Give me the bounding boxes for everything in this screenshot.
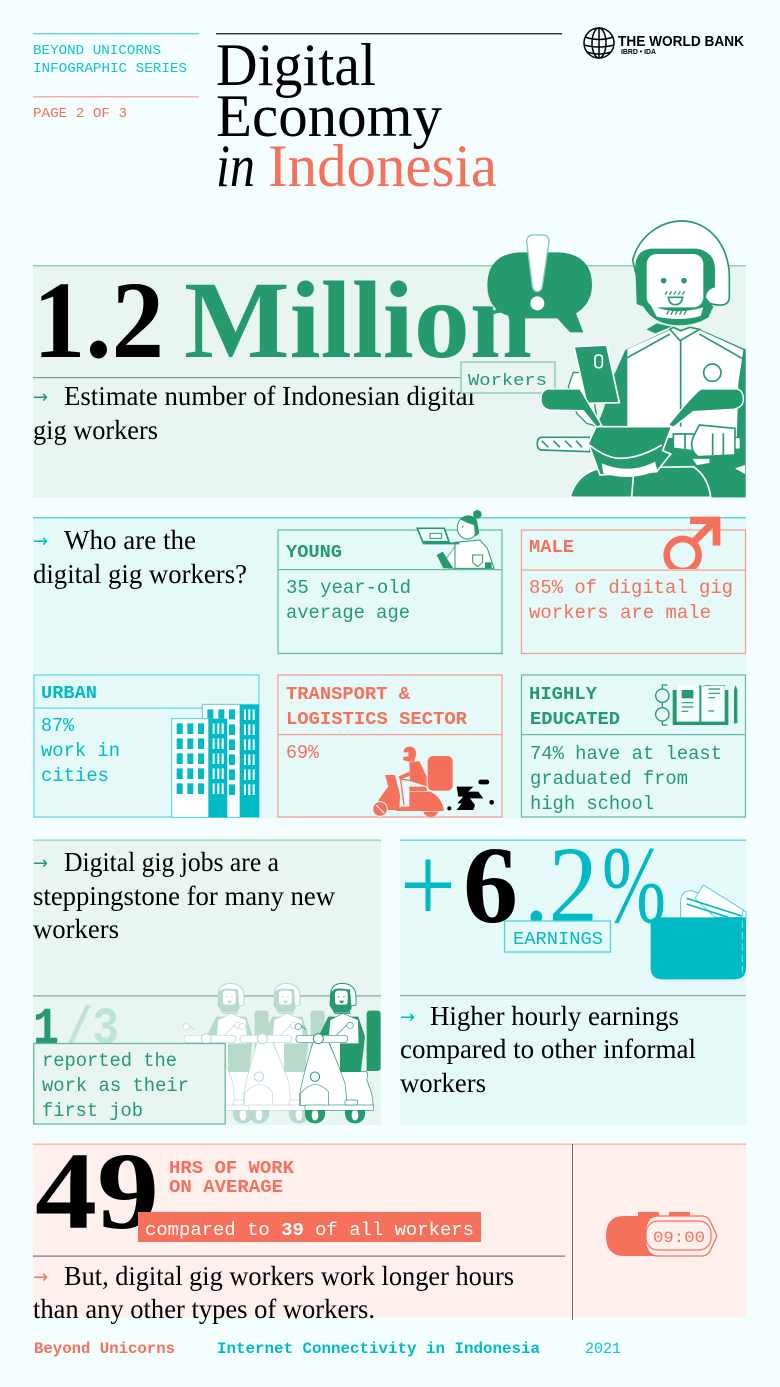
icon: city buildings [172, 704, 259, 817]
illustration: three riders [183, 983, 381, 1123]
card: transport and logistics: TRANSPORT & [286, 684, 411, 705]
panel: 1.2 million workers [33, 221, 746, 498]
description text: Estimate number of Indonesian digital [64, 381, 475, 411]
headline stat: 6 [463, 824, 518, 946]
statement text [400, 1001, 696, 1098]
statement text: steppingstone for many new [33, 881, 335, 911]
statement text: Digital gig jobs are a [64, 847, 279, 877]
stat: one third: /3 [66, 1000, 119, 1059]
statement text: compared to other informal [400, 1034, 696, 1064]
title: Economy [216, 83, 442, 149]
card: highly educated [522, 675, 746, 817]
description text: gig workers [33, 415, 158, 445]
callout: first job [34, 1044, 225, 1124]
footer: Internet Connectivity in Indonesia [217, 1340, 540, 1358]
card: young: YOUNG [286, 542, 342, 563]
panel background [33, 266, 746, 498]
card: highly educated: graduated from [530, 768, 688, 790]
panel: steppingstone [33, 840, 381, 1125]
card: young: 35 year-old [286, 577, 411, 599]
statement text: → [33, 853, 48, 874]
logo: The World Bank: THE WORLD BANK [618, 34, 744, 50]
callout: compared to 39: compared to 39 of all workers [145, 1220, 474, 1241]
panel: who are the gig workers [33, 510, 746, 818]
panel background [33, 518, 746, 818]
title: Digital [216, 32, 376, 98]
panel top rule [33, 517, 746, 518]
card: young: average age [286, 602, 410, 624]
callout: first job: work as their [42, 1075, 189, 1097]
card: transport and logistics: 69% [286, 742, 320, 764]
card: highly educated: EDUCATED [530, 709, 620, 730]
icon: worker with laptop tray [417, 510, 494, 568]
panel background [33, 840, 381, 1125]
label: earnings [504, 921, 610, 952]
logo: The World Bank: IBRD • IDA [621, 49, 656, 56]
card: highly educated: 74% have at least [530, 743, 722, 765]
header: series label: PAGE 2 OF 3 [33, 106, 127, 122]
heading question: digital gig workers? [33, 559, 247, 589]
panel: higher earnings [400, 824, 746, 1125]
headline stat: % [602, 824, 666, 946]
panel top rule [33, 265, 746, 266]
card: urban: work in [41, 740, 120, 762]
footer: 2021 [585, 1340, 621, 1358]
rider figure [541, 221, 746, 497]
card: urban: 87% [41, 715, 75, 737]
statement text: workers [400, 1068, 486, 1098]
divider rule [33, 377, 543, 378]
headline stat: .2 [524, 824, 598, 946]
heading question: → [33, 531, 48, 552]
panel: longer hours [33, 1130, 746, 1324]
icon: alarm clock [606, 1212, 717, 1256]
statement text: workers [33, 914, 119, 944]
divider rule [33, 995, 381, 996]
headline unit: Million [184, 259, 532, 381]
label: hours of work: ON AVERAGE [169, 1178, 283, 1198]
header: series label: BEYOND UNICORNS [33, 43, 161, 59]
headline number: 49 [35, 1130, 159, 1252]
statement text: → [400, 1007, 415, 1028]
card: transport and logistics [278, 675, 502, 817]
headline stat [400, 824, 666, 946]
vertical divider [572, 1144, 573, 1320]
panel background [400, 840, 746, 1125]
card: young [278, 510, 502, 654]
icon: delivery scooter [373, 747, 494, 817]
label: hours of work [169, 1159, 294, 1198]
icon: male symbol [667, 517, 720, 571]
statement text [33, 847, 335, 944]
footer [34, 1340, 621, 1358]
icon: glasses, book and pencil [656, 685, 737, 725]
title: Indonesia [268, 133, 497, 199]
header: series label: INFOGRAPHIC SERIES [33, 61, 187, 77]
panel top rule [33, 1144, 746, 1145]
logo: The World Bank [584, 28, 744, 58]
card: urban: URBAN [41, 683, 97, 704]
heading question [33, 525, 247, 589]
card: transport and logistics: LOGISTICS SECTOR [286, 709, 468, 730]
description text: → [33, 387, 48, 408]
callout: first job: reported the [42, 1050, 177, 1072]
panel top rule [33, 840, 381, 841]
panel top rule [400, 840, 746, 841]
statement text [33, 1261, 514, 1324]
label: earnings: EARNINGS [513, 930, 603, 950]
statement text: → [33, 1267, 48, 1288]
divider rule [33, 1256, 565, 1257]
card: highly educated: HIGHLY [529, 684, 598, 705]
stat: one third [33, 1000, 119, 1059]
card: male: 85% of digital gig [529, 577, 733, 599]
card: urban [34, 675, 259, 817]
statement text: Higher hourly earnings [430, 1001, 679, 1031]
card: highly educated: high school [530, 793, 654, 815]
headline stat: + [400, 824, 456, 946]
label: hours of work: HRS OF WORK [169, 1159, 294, 1179]
statement text: than any other types of workers. [33, 1294, 375, 1324]
label: workers: Workers [468, 372, 547, 391]
headline number: 1.2 [33, 259, 164, 381]
scooter handlebars and hand [537, 425, 745, 497]
card: male: workers are male [529, 602, 711, 624]
stat: one third: 1 [33, 1000, 59, 1059]
callout: compared to 39 [138, 1212, 481, 1242]
header: series label [33, 33, 199, 122]
panel background [33, 1144, 746, 1317]
title [216, 32, 562, 199]
footer: Beyond Unicorns [34, 1340, 175, 1358]
icon: alarm clock: 09:00 [653, 1229, 705, 1247]
icon: speech bubble with exclamation [487, 235, 592, 332]
callout: first job: first job [42, 1100, 143, 1122]
title: in [216, 133, 255, 199]
heading question: Who are the [64, 525, 196, 555]
card: male: MALE [529, 537, 574, 558]
card: male [522, 517, 746, 654]
card: urban: cities [41, 765, 109, 787]
illustration: wallet [651, 885, 746, 979]
divider rule [400, 995, 746, 996]
illustration: rider with phone [487, 221, 746, 497]
statement text: But, digital gig workers work longer hours [64, 1261, 514, 1291]
label: workers [461, 362, 555, 393]
description text [33, 381, 475, 445]
